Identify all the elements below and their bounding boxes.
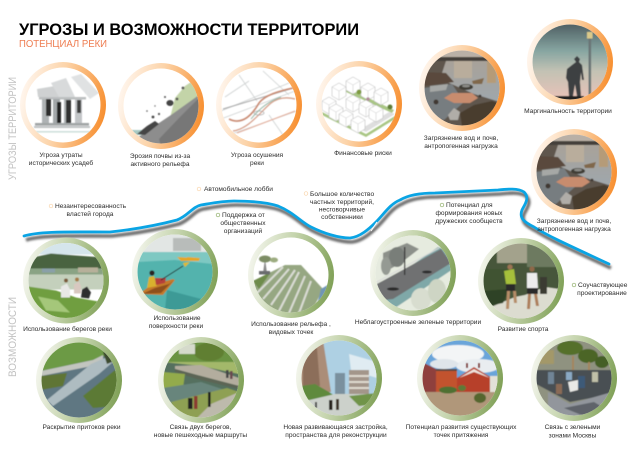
icon: drained river plan (221, 71, 297, 135)
callout: many private territories (304, 191, 374, 221)
callout: many private territories: несговорчивые (319, 206, 365, 214)
panel: threat, financial risks (316, 61, 402, 157)
callout: disinterested city authorities: властей города (67, 210, 114, 218)
caption: новые пешеходные маршруты (154, 432, 247, 439)
side heading: opportunities: ВОЗМОЖНОСТИ (7, 297, 19, 377)
icon: isometric blocks (322, 77, 395, 137)
panel: threat, river draining (216, 62, 302, 167)
image: new towers (301, 340, 377, 416)
photo: brick buildings (422, 340, 500, 416)
caption: Неблагоустроенные зеленые территории (355, 318, 481, 326)
callout: potential for friendly communities: формирования новых (436, 210, 503, 217)
panel: opportunity, undeveloped green territories (355, 230, 481, 326)
image: path through trees (375, 235, 453, 311)
callout: participatory design: проектирование (577, 290, 627, 297)
caption: зонами Москвы (549, 432, 597, 440)
panel: threat, soil erosion (118, 63, 204, 168)
caption: Финансовые риски (334, 150, 392, 157)
photo: pedestrian bridge (163, 342, 239, 418)
caption: антропогенная нагрузка (424, 143, 498, 150)
callout: disinterested city authorities: Незаинтересованность (55, 203, 127, 210)
callout: disinterested city authorities (49, 203, 127, 218)
panel: opportunity, link of two banks (154, 337, 247, 439)
caption: Загрязнение вод и почв, (537, 218, 611, 225)
caption: Развитие спорта (498, 326, 549, 333)
photo: polluted riverbank (536, 134, 612, 210)
photo: silhouette under street lamp (532, 24, 608, 100)
panel: opportunity, sports (478, 238, 564, 333)
caption: точек притяжения (434, 432, 489, 439)
caption: Связь двух берегов, (170, 423, 231, 431)
callout: support from public organisations (216, 212, 266, 235)
panel: threat, water and soil pollution (419, 45, 505, 150)
callout: potential for friendly communities (435, 202, 503, 225)
callout: participatory design (572, 282, 628, 297)
callout: many private territories: Большое количество (310, 191, 374, 198)
panel: threat, loss of historic estates (20, 62, 106, 167)
caption: реки (250, 160, 264, 167)
callout: potential for friendly communities: дружеских сообществ (435, 217, 503, 225)
caption: Использование берегов реки (23, 325, 112, 333)
caption: Угроза осушения (231, 152, 284, 159)
callout: support from public organisations: организаций (224, 227, 263, 235)
caption: поверхности реки (149, 323, 203, 330)
panel: opportunity, terrain and viewpoints (248, 232, 334, 336)
photo: polluted riverbank (424, 50, 500, 126)
icon: crumbling temple (34, 74, 98, 133)
caption: Потенциал развития существующих (406, 424, 517, 431)
photo: picnic on bank (28, 242, 104, 318)
caption: Использование рельефа , (251, 321, 331, 328)
river (24, 189, 611, 268)
caption: пространства для реконструкции (285, 432, 387, 439)
caption: антропогенная нагрузка (537, 226, 611, 233)
icon: eroding slope (132, 82, 198, 144)
side heading: threats: УГРОЗЫ ТЕРРИТОРИИ (7, 77, 19, 180)
callout: car lobby: Автомобильное лобби (204, 185, 273, 193)
caption: Раскрытие притоков реки (42, 424, 121, 431)
photo: crowd by water (536, 340, 612, 416)
title: УГРОЗЫ И ВОЗМОЖНОСТИ ТЕРРИТОРИИ (19, 21, 359, 39)
panel: opportunity, new developments (283, 335, 388, 439)
caption: Новая развивающаяся застройка, (283, 423, 388, 431)
panel: threat, anthropogenic load (531, 129, 617, 233)
photo: kayaks (137, 234, 213, 310)
image: grass terraces (253, 256, 331, 313)
caption: Загрязнение вод и почв, (424, 135, 498, 142)
panel: opportunity, river banks (23, 238, 112, 333)
caption: Использование (153, 315, 201, 322)
callout: participatory design: Соучаствующее (578, 282, 628, 289)
caption: Угроза утраты (39, 152, 83, 159)
callout: support from public organisations: общественных (220, 219, 266, 227)
panel: opportunity, link to Moscow green zones (531, 335, 617, 440)
panel: threat, marginal territory (524, 19, 613, 115)
callout: many private territories: частных территорий, (310, 198, 374, 206)
caption: Эрозия почвы из-за (130, 153, 190, 160)
caption: видовых точек (269, 329, 313, 336)
callout: many private territories: собственники (321, 213, 363, 221)
caption: Маргинальность территории (524, 108, 612, 115)
caption: активного рельефа (130, 161, 190, 168)
panel: opportunity, existing attraction points (406, 335, 517, 439)
panel: opportunity, opening tributaries (36, 337, 122, 431)
callout: support from public organisations: Поддержка от (222, 212, 265, 219)
callout: potential for friendly communities: Потенциал для (446, 202, 493, 209)
photo: runners (483, 243, 559, 319)
caption: исторических усадеб (29, 159, 93, 167)
subtitle: ПОТЕНЦИАЛ РЕКИ (19, 39, 107, 50)
caption: Связь с зелеными (545, 424, 601, 431)
panel: opportunity, river surface (132, 229, 218, 330)
photo: stream with reeds (41, 342, 119, 418)
